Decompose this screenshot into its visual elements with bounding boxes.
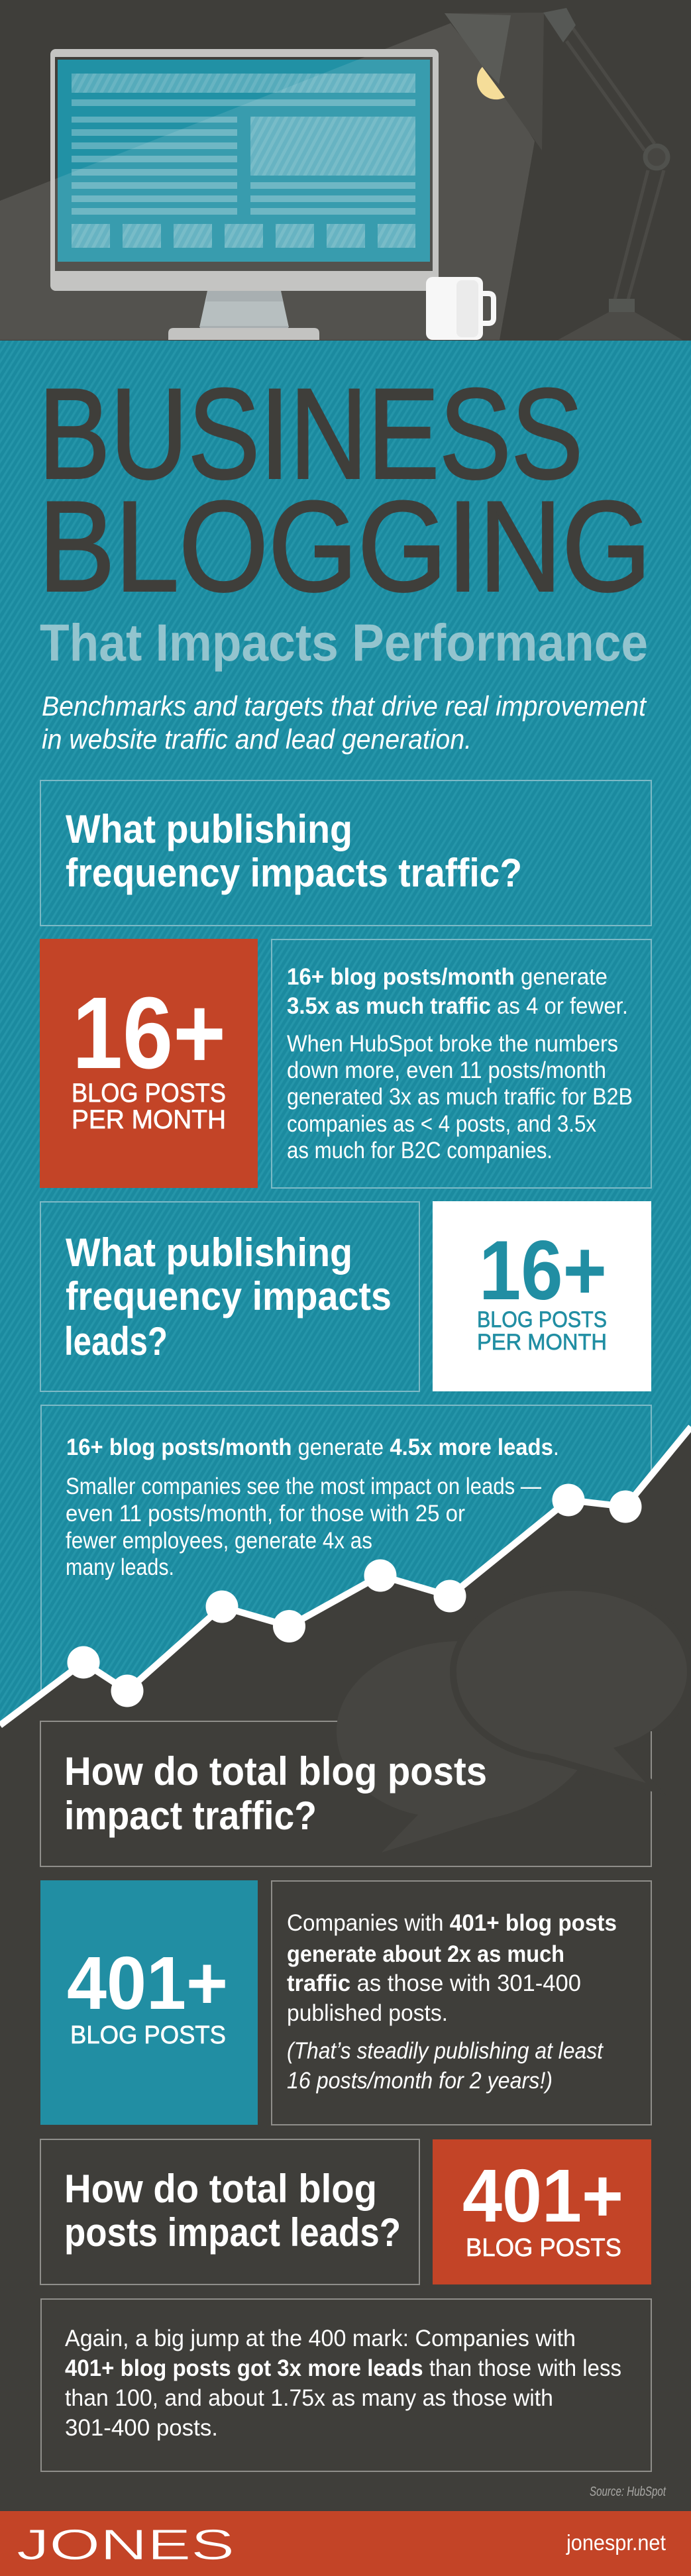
footer url: jonespr.net: [566, 2530, 666, 2555]
text block: 301-400 posts.: [65, 2415, 218, 2441]
stat number: 16+: [72, 976, 226, 1090]
panel: traffic 401 explanation: [272, 1881, 651, 2125]
intro text: [42, 690, 647, 755]
text block: generated 3x as much traffic for B2B: [287, 1084, 633, 1110]
stat label: [72, 1079, 226, 1134]
heading: [64, 2167, 401, 2255]
subtitle: That Impacts Performance: [40, 613, 648, 672]
text block: leads explanation: fewer employees, generate 4x as: [66, 1528, 372, 1554]
text block: [287, 964, 633, 1163]
stat number: 401+: [462, 2154, 623, 2237]
stat label: PER MONTH: [477, 1330, 607, 1355]
intro text: in website traffic and lead generation.: [42, 724, 472, 755]
heading: leads?: [64, 1319, 168, 1364]
text block: When HubSpot broke the numbers: [287, 1031, 618, 1057]
text block: 3.5x as much traffic as 4 or fewer.: [287, 993, 628, 1019]
text block: Again, a big jump at the 400 mark: Companies with: [65, 2326, 576, 2351]
light beam from lamp: [0, 23, 535, 340]
stat label: BLOG POSTS: [477, 1307, 607, 1332]
text block: (That’s steadily publishing at least: [287, 2038, 604, 2064]
icon: coffee mug: [426, 277, 494, 340]
hero illustration: desk scene: [0, 8, 682, 340]
icon: desktop monitor: [50, 49, 439, 340]
heading: How do total blog: [64, 2167, 377, 2211]
panel: heading total posts leads: [40, 2139, 419, 2284]
text block: as much for B2C companies.: [287, 1138, 553, 1163]
panel: leads 401 explanation: [41, 2299, 651, 2471]
text block: Companies with 401+ blog posts: [287, 1910, 617, 1936]
heading: total posts traffic: How do total blog posts: [64, 1749, 487, 1794]
panel: 401+ teal stat: [40, 1880, 258, 2125]
source note: Source: HubSpot: [590, 2485, 666, 2499]
panel: leads explanation frame: [41, 1405, 651, 1737]
text block: 401+ blog posts got 3x more leads than those with less: [65, 2355, 621, 2381]
text block: [65, 2326, 621, 2441]
heading: posts impact leads?: [64, 2210, 401, 2255]
text block: leads explanation: 16+ blog posts/month generate 4.5x more leads.: [66, 1434, 559, 1460]
text block: generate about 2x as much: [287, 1941, 564, 1967]
panel: heading frequency leads: [40, 1202, 419, 1391]
logo: Jones: JONES: [17, 2520, 235, 2569]
text block: companies as < 4 posts, and 3.5x: [287, 1111, 596, 1137]
heading: What publishing: [66, 807, 352, 851]
dark lower section under chart line: [0, 1427, 691, 2576]
icon: speech bubbles: [337, 1591, 687, 1852]
text block: [287, 1910, 617, 2094]
teal background section: [0, 341, 691, 1732]
text block: leads explanation: even 11 posts/month, for those with 25 or: [66, 1501, 465, 1527]
text block: published posts.: [287, 2000, 448, 2026]
heading: [64, 1230, 392, 1364]
heading: total posts traffic: [64, 1749, 487, 1838]
text block: leads explanation: [66, 1434, 559, 1580]
text block: 16 posts/month for 2 years!): [287, 2068, 553, 2094]
stat label: BLOG POSTS: [70, 2021, 226, 2049]
text block: than 100, and about 1.75x as many as those with: [65, 2385, 553, 2411]
panel: 401+ orange stat: [433, 2139, 651, 2284]
stat label: PER MONTH: [72, 1105, 226, 1134]
panel: 16+ orange stat: [40, 939, 258, 1188]
stat label: BLOG POSTS: [466, 2234, 621, 2262]
heading: frequency impacts traffic?: [66, 851, 522, 895]
text block: 16+ blog posts/month generate: [287, 964, 608, 990]
footer bar: [0, 2511, 691, 2576]
frame: total posts traffic heading: [40, 1721, 651, 1866]
panel: 16+ white stat: [433, 1201, 651, 1391]
text block: down more, even 11 posts/month: [287, 1057, 606, 1083]
heading: total posts traffic: impact traffic?: [64, 1794, 317, 1838]
text block: traffic as those with 301-400: [287, 1970, 581, 1996]
title: Business Blogging: [38, 362, 651, 619]
panel: heading frequency traffic: [40, 780, 651, 926]
screen: page layout: [72, 74, 415, 248]
title: Business Blogging: BUSINESS: [38, 362, 583, 506]
text block: leads explanation: Smaller companies see the most impact on leads —: [66, 1474, 541, 1499]
heading: frequency impacts: [66, 1274, 392, 1318]
heading: What publishing: [66, 1230, 352, 1275]
stat number: 16+: [479, 1223, 607, 1317]
stat label: [477, 1307, 607, 1355]
chart: rising line with points: [0, 1427, 691, 1725]
text block: leads explanation: many leads.: [66, 1554, 174, 1580]
heading: [66, 807, 522, 895]
stat number: 401+: [67, 1941, 228, 2025]
intro text: Benchmarks and targets that drive real improvement: [42, 690, 647, 722]
panel: traffic explanation: [272, 939, 651, 1188]
stat label: BLOG POSTS: [72, 1079, 226, 1108]
icon: desk lamp: [445, 8, 682, 340]
